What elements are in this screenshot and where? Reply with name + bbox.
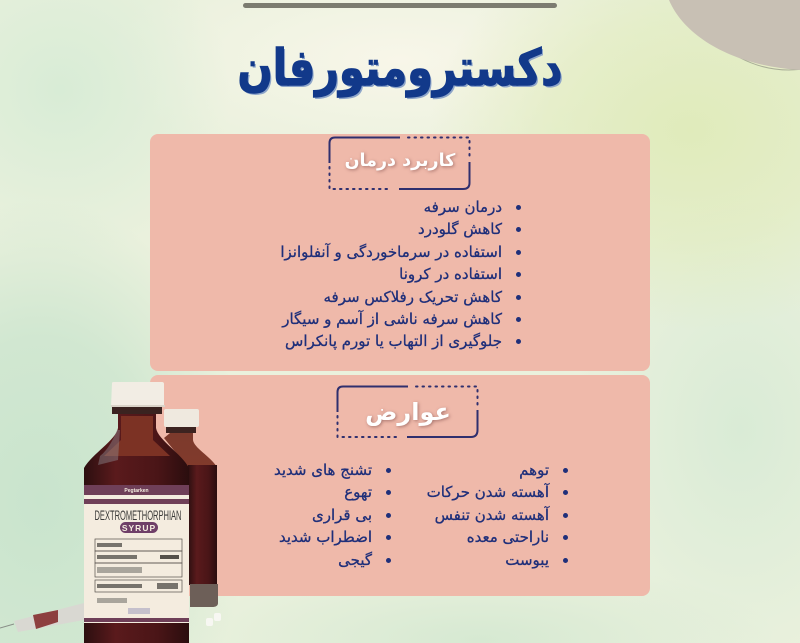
bottle label: Pegtarken — [124, 488, 149, 494]
list: side effects left column: بی قراری — [312, 506, 372, 524]
back bottle — [164, 409, 218, 607]
decorative circle, top right — [669, 0, 800, 70]
list: side effects left column — [274, 461, 391, 569]
bottle label: SYRUP — [122, 523, 156, 533]
list: treatment uses: کاهش تحریک رفلاکس سرفه — [324, 288, 502, 306]
list: treatment uses: استفاده در سرماخوردگی و آنفلوانزا — [280, 243, 502, 261]
panel: side effects — [150, 375, 650, 596]
list: side effects right column: ناراحتی معده — [467, 528, 549, 546]
list: side effects right column: توهم — [519, 461, 549, 479]
list: treatment uses: درمان سرفه — [424, 198, 502, 216]
bottle label: DEXTROMETHORPHIAN — [94, 507, 182, 523]
list: treatment uses: کاهش گلودرد — [418, 220, 502, 238]
panel: treatment uses — [150, 134, 650, 371]
syringe — [0, 603, 84, 632]
illustration: syrup bottles and syringe — [0, 382, 221, 643]
list: treatment uses — [280, 198, 521, 350]
list: treatment uses: جلوگیری از التهاب یا تورم پانکراس — [285, 332, 502, 350]
top scrollbar strip — [243, 3, 557, 8]
list: side effects left column: تشنج های شدید — [274, 461, 372, 479]
list: side effects right column: یبوست — [505, 551, 549, 569]
bottle label — [84, 485, 189, 623]
front bottle — [84, 382, 189, 643]
list: treatment uses: کاهش سرفه ناشی از آسم و سیگار — [282, 310, 502, 328]
list: side effects left column: گیجی — [338, 551, 372, 569]
list: side effects right column: آهسته شدن حرکات — [427, 483, 549, 501]
pills — [206, 613, 221, 626]
list: side effects left column: تهوع — [344, 483, 372, 501]
heading: side effects: عوارض — [365, 398, 451, 426]
list: side effects right column: آهسته شدن تنفس — [435, 506, 549, 524]
heading frame: side effects — [336, 386, 478, 438]
title: دکسترومتورفان — [238, 39, 562, 97]
heading frame: treatment uses — [328, 136, 470, 190]
list: treatment uses: استفاده در کرونا — [399, 265, 502, 283]
list: side effects right column — [427, 461, 568, 569]
list: side effects left column: اضطراب شدید — [279, 528, 372, 546]
heading: treatment uses: کاربرد درمان — [345, 151, 455, 171]
